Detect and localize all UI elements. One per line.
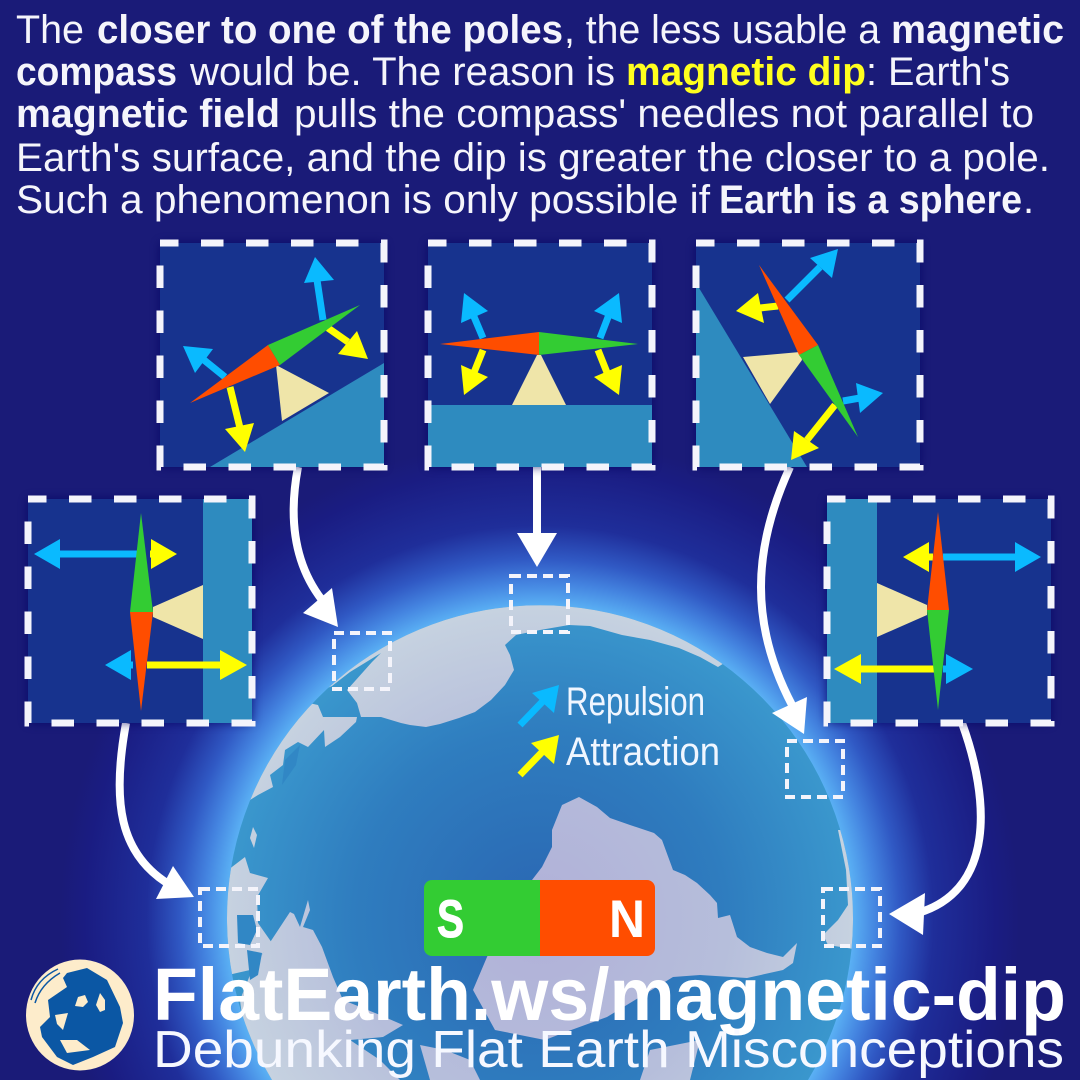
intro paragraph: pulls the compass' needles not parallel to [294, 92, 1034, 136]
intro paragraph: . [1023, 178, 1034, 222]
intro paragraph: , the less usable a [564, 8, 881, 52]
intro paragraph: The [16, 8, 84, 52]
arrow: panel 2 to small square [517, 467, 557, 567]
intro paragraph: compass [16, 50, 177, 94]
logo: flat earth disc [26, 960, 134, 1070]
site title: FlatEarth.ws/magnetic-dip [153, 953, 1066, 1036]
intro paragraph: Earth is a sphere [719, 178, 1022, 222]
arrow: panel left to small square [120, 723, 194, 899]
legend [520, 680, 720, 775]
panel: vertical right compass [827, 499, 1051, 723]
intro paragraph [16, 8, 1064, 222]
legend: Attraction [566, 730, 720, 774]
tagline: Debunking Flat Earth Misconceptions [153, 1021, 1064, 1079]
intro paragraph: magnetic [891, 8, 1064, 52]
bar magnet: N [609, 890, 645, 949]
intro paragraph: Such a phenomenon is only possible if [16, 178, 711, 222]
small dashed locator squares [200, 576, 880, 946]
intro paragraph: : Earth's [866, 50, 1010, 94]
globe [227, 605, 853, 1080]
panel: tilted left compass [160, 243, 384, 467]
panel: level top compass [428, 243, 652, 467]
arrow: panel 3 to small square [761, 467, 807, 734]
intro paragraph: Earth's surface, and the dip is greater the closer to a pole. [16, 136, 1050, 180]
intro paragraph: magnetic field [16, 92, 280, 136]
legend: Repulsion [566, 680, 705, 724]
arrow: panel 1 to small square [294, 467, 338, 627]
intro paragraph: would be. The reason is [189, 50, 615, 94]
arrow: panel right to small square [889, 723, 981, 935]
bar magnet [424, 880, 655, 956]
panel: vertical left compass [28, 499, 252, 723]
intro paragraph: closer to one of the poles [97, 8, 563, 52]
intro paragraph: magnetic dip [626, 50, 866, 94]
panel: tilted right compass [696, 243, 920, 467]
bar magnet: S [437, 890, 464, 949]
